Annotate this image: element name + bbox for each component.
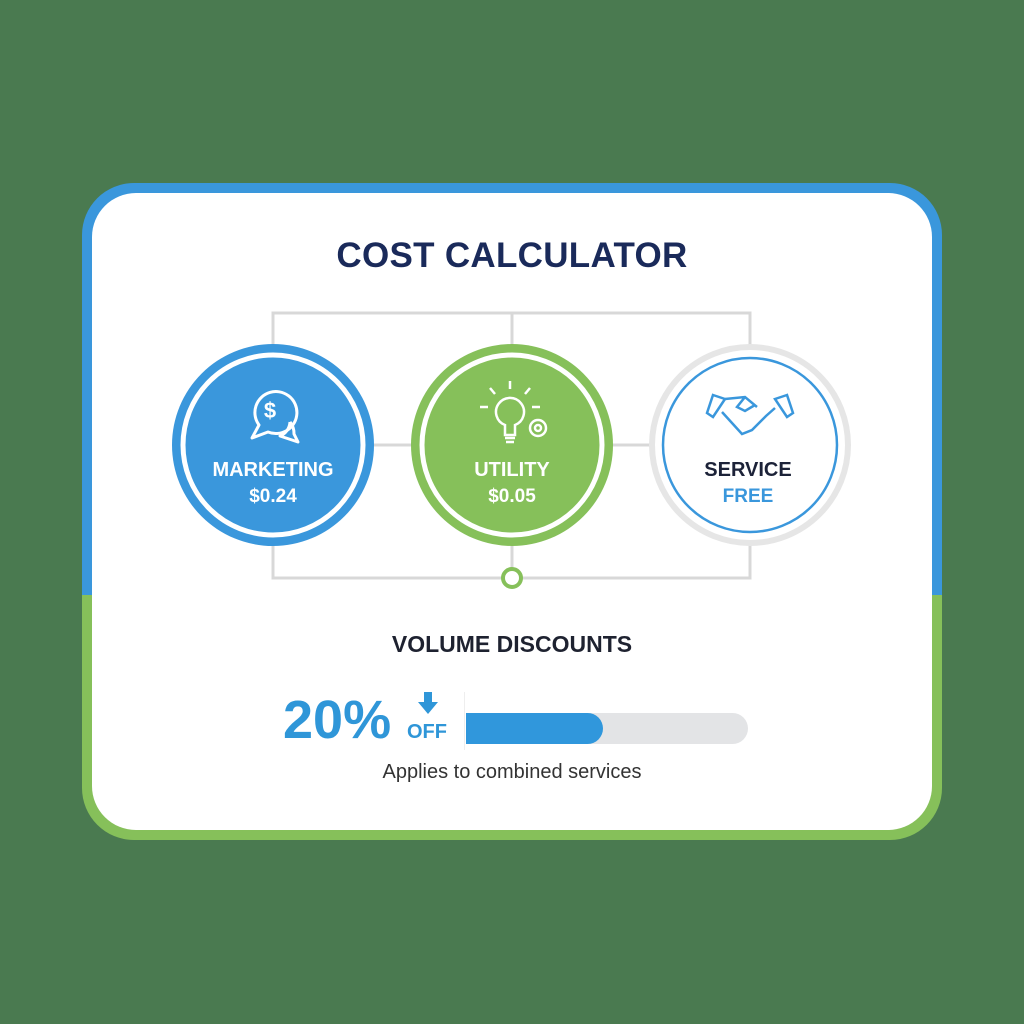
circle: utility <box>411 344 613 546</box>
discount value: 20% <box>283 690 391 750</box>
off label: OFF <box>407 721 447 743</box>
progress bar <box>466 713 748 744</box>
icon: dollar chat <box>252 392 298 442</box>
connector node <box>503 569 521 587</box>
circle: service: SERVICE <box>704 459 792 481</box>
title: COST CALCULATOR <box>336 236 688 275</box>
icon: bulb gear <box>480 381 546 442</box>
caption: Applies to combined services <box>382 761 642 783</box>
circle: marketing: $ <box>264 398 276 423</box>
circle: utility: $0.05 <box>488 486 536 507</box>
heading: volume discounts: VOLUME DISCOUNTS <box>392 631 632 657</box>
circle: marketing: MARKETING <box>212 459 334 481</box>
icon: handshake <box>707 395 793 434</box>
card <box>82 183 942 840</box>
circle: utility: UTILITY <box>474 459 550 481</box>
icon: down arrow <box>418 692 438 714</box>
circle: marketing <box>172 344 374 546</box>
circle: service: FREE <box>723 486 773 507</box>
circle: service <box>652 347 848 543</box>
circle: marketing: $0.24 <box>249 486 297 507</box>
